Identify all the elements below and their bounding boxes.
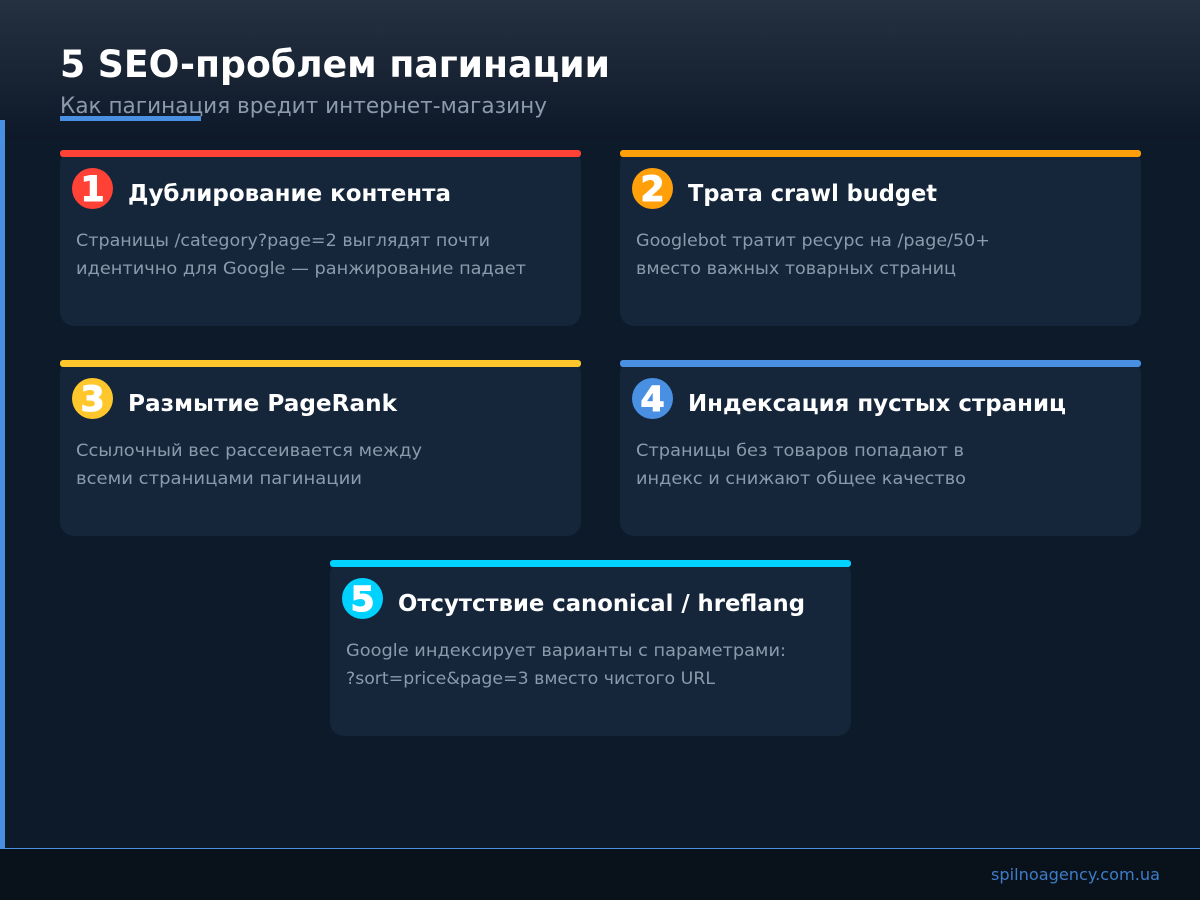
card 4 text: индекс и снижают общее качество xyxy=(636,469,966,489)
icon: number 3 xyxy=(72,378,113,420)
card 3 text: всеми страницами пагинации xyxy=(76,469,362,489)
panel: card 1 duplicate content xyxy=(60,150,581,326)
icon: number 1 xyxy=(72,168,113,210)
card 1 heading: Дублирование контента xyxy=(128,181,451,207)
icon: number 2: 2 xyxy=(640,170,665,210)
card 5 text: Google индексирует варианты с параметрами: xyxy=(346,641,786,661)
card 3 text xyxy=(76,441,422,489)
icon: number 4: 4 xyxy=(640,380,665,420)
subtitle: Как пагинация вредит интернет-магазину xyxy=(60,94,547,119)
card 1 text xyxy=(76,231,526,279)
card 2 text: вместо важных товарных страниц xyxy=(636,259,956,279)
footer band xyxy=(0,848,1200,900)
subtitle underline xyxy=(60,116,201,121)
card 4 text: Страницы без товаров попадают в xyxy=(636,441,964,461)
icon: number 3: 3 xyxy=(80,380,105,420)
icon: number 4 xyxy=(632,378,673,420)
card 5 text: ?sort=price&page=3 вместо чистого URL xyxy=(346,669,716,689)
icon: number 2 xyxy=(632,168,673,210)
icon: number 5: 5 xyxy=(350,580,375,620)
panel: card 3 PageRank xyxy=(60,360,581,536)
card 3 text: Ссылочный вес рассеивается между xyxy=(76,441,422,461)
left accent bar xyxy=(0,120,5,848)
panel: card 4 empty pages xyxy=(620,360,1141,536)
card 4 text xyxy=(636,441,966,489)
title: 5 SEO-проблем пагинации xyxy=(60,43,610,86)
panel: card 2 crawl budget xyxy=(620,150,1141,326)
card 1 text: идентично для Google — ранжирование падает xyxy=(76,259,526,279)
card 5 heading: Отсутствие canonical / hreflang xyxy=(398,591,805,617)
card 1 text: Страницы /category?page=2 выглядят почти xyxy=(76,231,490,251)
panel: card 5 canonical hreflang xyxy=(330,560,851,736)
icon: number 5 xyxy=(342,578,383,620)
card 3 heading: Размытие PageRank xyxy=(128,391,398,417)
footer website: spilnoagency.com.ua xyxy=(991,865,1160,884)
card 4 heading: Индексация пустых страниц xyxy=(688,391,1066,417)
card 2 heading: Трата crawl budget xyxy=(688,181,937,207)
icon: number 1: 1 xyxy=(80,170,105,210)
card 2 text xyxy=(636,231,990,279)
card 5 text xyxy=(346,641,786,689)
card 2 text: Googlebot тратит ресурс на /page/50+ xyxy=(636,231,990,251)
